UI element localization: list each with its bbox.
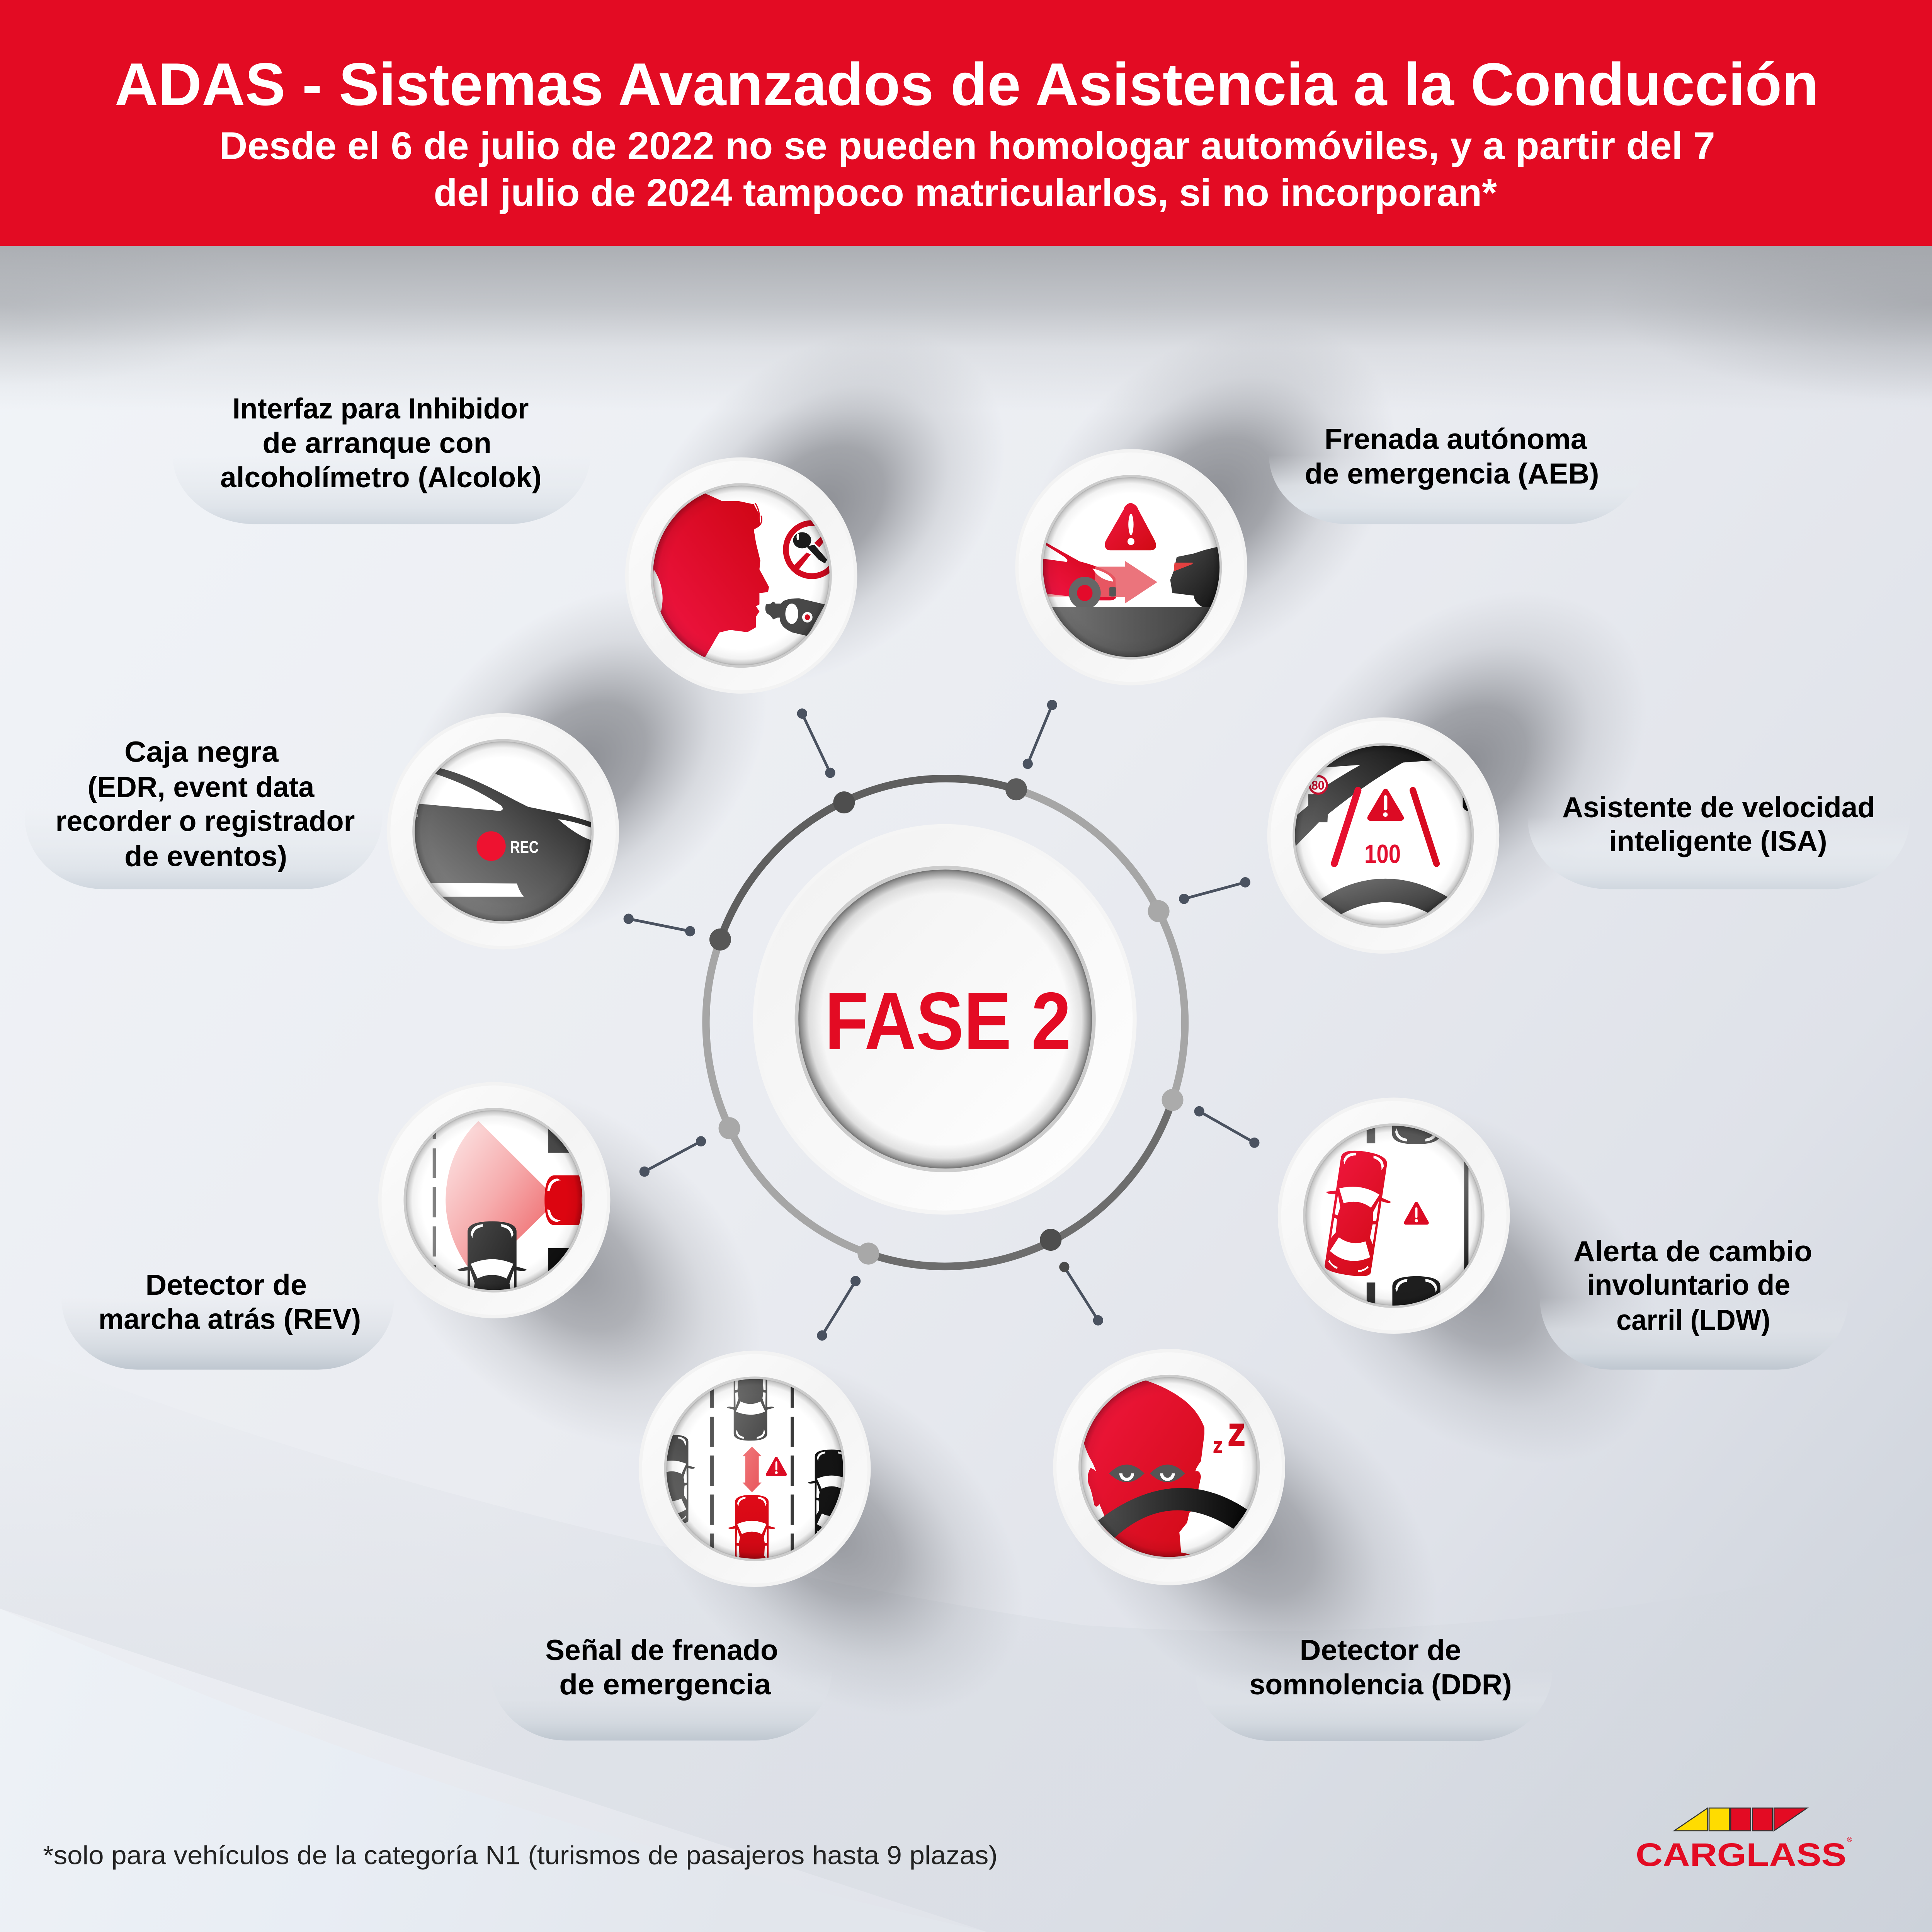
icon: black box: REC — [510, 838, 539, 857]
icon: drowsiness: Z — [1214, 1438, 1222, 1456]
icon: speed assistant: 100 — [1364, 840, 1401, 869]
subtitle line 1: Desde el 6 de julio de 2022 no se pueden homologar automóviles, y a partir del 7 — [219, 124, 1715, 167]
connector — [639, 1136, 706, 1177]
label pill — [1540, 1226, 1848, 1370]
label text — [1562, 791, 1875, 857]
label text — [99, 1269, 361, 1335]
feature: DDR — [1053, 1262, 1553, 1741]
logo: Carglass — [1636, 1808, 1852, 1873]
label pill — [1195, 1598, 1553, 1741]
heading: FASE 2: FASE 2 — [825, 976, 1071, 1066]
label text: Señal de frenado — [545, 1634, 778, 1666]
label pill — [25, 727, 382, 889]
icon: drowsiness: Z — [1229, 1418, 1245, 1452]
label pill — [173, 386, 590, 524]
label text: recorder o registrador — [56, 805, 355, 837]
icon: speed assistant — [1267, 718, 1499, 954]
label text: (EDR, event data — [88, 771, 315, 803]
connector — [1179, 877, 1250, 904]
label text: involuntario de — [1587, 1269, 1790, 1301]
connector — [797, 708, 835, 778]
label text: Detector de — [145, 1269, 307, 1301]
label text: Detector de — [1300, 1634, 1461, 1666]
label text — [1305, 423, 1599, 490]
connector — [624, 914, 695, 936]
title: ADAS - Sistemas Avanzados de Asistencia a la Conducción — [115, 51, 1819, 118]
label text: de eventos) — [124, 840, 287, 872]
label text: Interfaz para Inhibidor — [232, 392, 529, 425]
feature: EDR — [25, 713, 695, 949]
logo: Carglass: ® — [1847, 1835, 1852, 1844]
icon: drowsiness — [1053, 1349, 1285, 1585]
label text: carril (LDW) — [1616, 1304, 1770, 1336]
icon: alcohol interlock — [625, 457, 857, 694]
label text — [545, 1634, 778, 1701]
label pill — [490, 1598, 832, 1740]
feature: LDW — [1194, 1016, 1848, 1405]
central ring with nodes — [706, 778, 1185, 1266]
label text — [220, 392, 542, 493]
icon: reverse detector — [378, 1082, 673, 1352]
feature: Alcolok — [173, 386, 857, 778]
label text: Caja negra — [124, 736, 279, 768]
label text: de arranque con — [262, 427, 492, 459]
label pill — [1528, 744, 1910, 889]
connector — [1059, 1262, 1103, 1325]
footnote: *solo para vehículos de la categoría N1 (turismos de pasajeros hasta 9 plazas) — [43, 1841, 998, 1870]
label text: Frenada autónoma — [1325, 423, 1587, 455]
label text: alcoholímetro (Alcolok) — [220, 461, 542, 493]
label text: de emergencia — [559, 1668, 771, 1701]
label text — [1573, 1235, 1812, 1336]
icon: black box — [387, 713, 619, 949]
icon: speed assistant: 80 — [1311, 778, 1325, 793]
label text — [1249, 1634, 1512, 1701]
label text: inteligente (ISA) — [1609, 825, 1827, 857]
label text: Alerta de cambio — [1573, 1235, 1812, 1267]
label text: marcha atrás (REV) — [99, 1303, 361, 1335]
icon: emergency brake lights — [639, 1351, 871, 1587]
subtitle line 2: del julio de 2024 tampoco matricularlos, si no incorporan* — [434, 171, 1497, 214]
central badge: FASE 2 — [753, 824, 1137, 1214]
connector — [817, 1276, 861, 1341]
feature: AEB — [1016, 427, 1615, 769]
label text — [56, 736, 355, 872]
feature: REV — [61, 1082, 706, 1370]
connector — [1194, 1106, 1259, 1148]
feature: emergency stop signal — [490, 1276, 871, 1740]
label pill — [1269, 386, 1645, 524]
icon: lane departure — [1278, 1016, 1510, 1405]
feature: ISA — [1179, 718, 1910, 954]
icon: emergency braking — [1015, 449, 1247, 685]
connector — [1023, 700, 1057, 769]
label text: de emergencia (AEB) — [1305, 457, 1599, 490]
label text: somnolencia (DDR) — [1249, 1668, 1512, 1701]
label text: Asistente de velocidad — [1562, 791, 1875, 823]
header band — [0, 0, 1932, 246]
logo: Carglass: CARGLASS — [1636, 1836, 1846, 1873]
label pill — [61, 1226, 394, 1370]
